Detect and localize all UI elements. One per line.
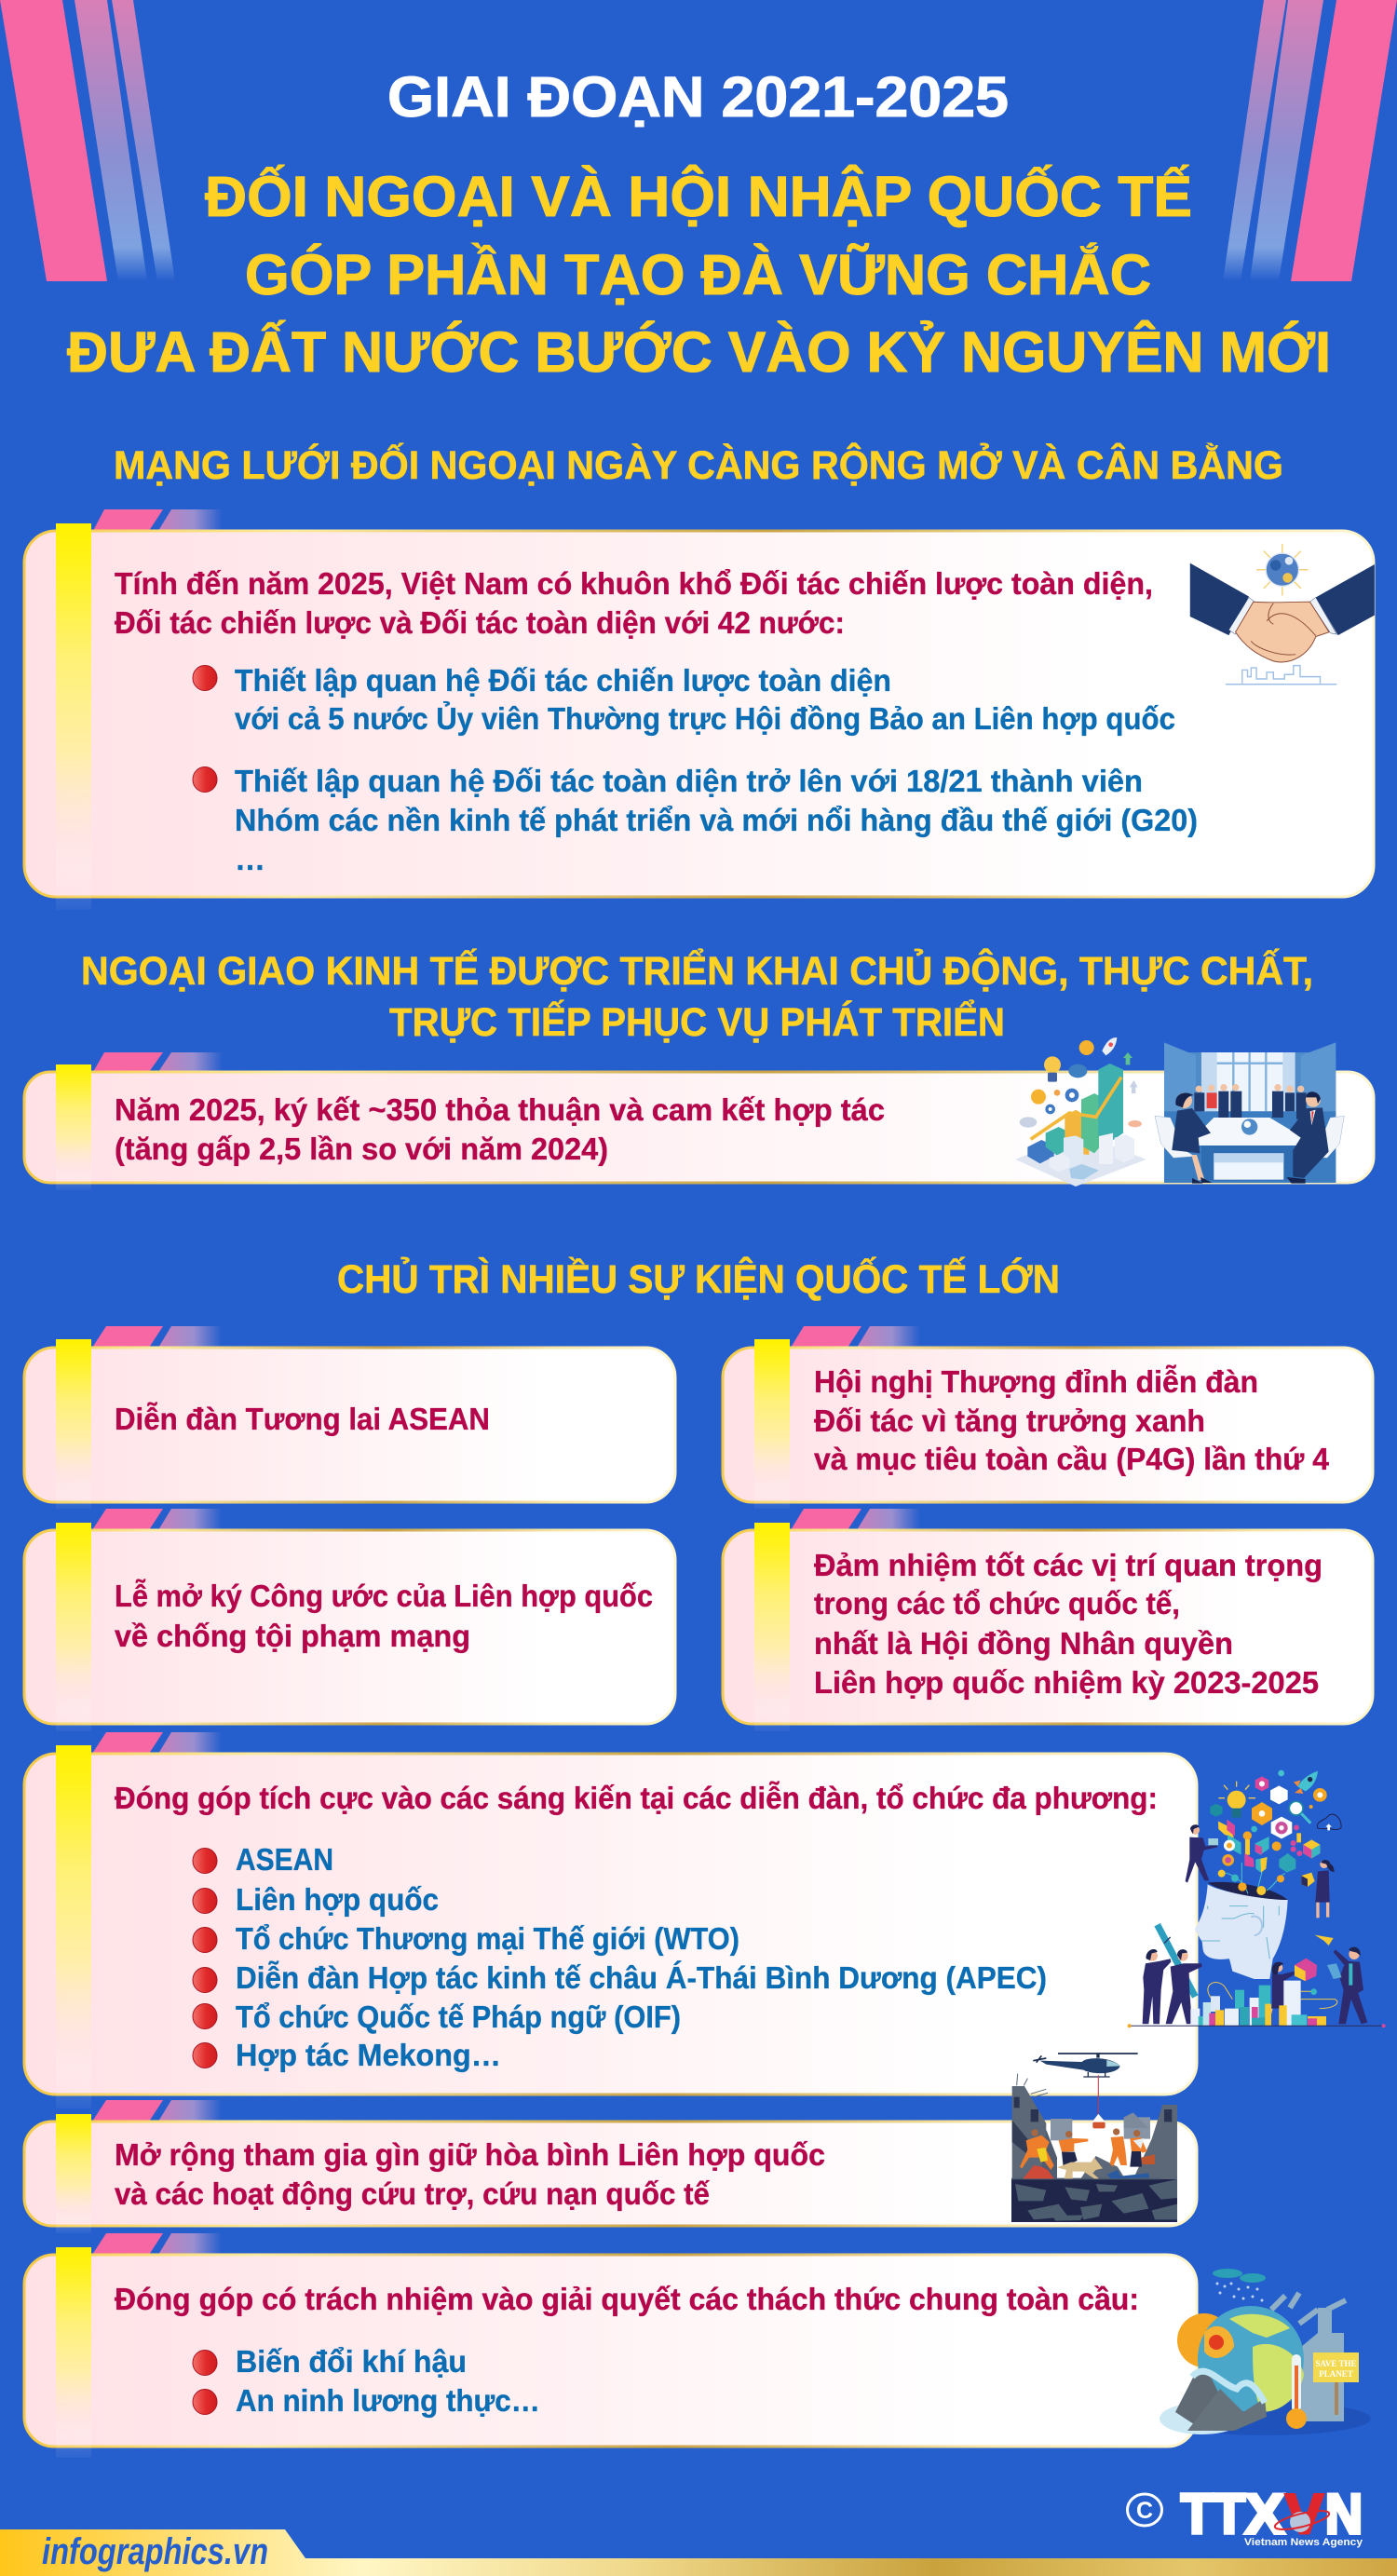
bullet list: Biến đổi khí hậu: [236, 2344, 467, 2379]
wordmark: V: [1285, 2483, 1323, 2545]
panel: international positions: [723, 1509, 1373, 1731]
icon: economic growth: [1015, 1037, 1146, 1186]
card background: [24, 1530, 675, 1724]
card background: [24, 2255, 1197, 2447]
title line 2: GÓP PHẦN TẠO ĐÀ VỮNG CHẮC: [245, 243, 1151, 306]
text: và các hoạt động cứu trợ, cứu nạn quốc tế: [115, 2176, 711, 2211]
title line 3: ĐƯA ĐẤT NƯỚC BƯỚC VÀO KỶ NGUYÊN MỚI: [67, 320, 1331, 384]
lead text: Đối tác chiến lược và Đối tác toàn diện với 42 nước:: [115, 605, 845, 640]
sign: save the planet: PLANET: [1319, 2369, 1353, 2379]
card background: [24, 531, 1374, 897]
bullet list: Nhóm các nền kinh tế phát triển và mới nổi hàng đầu thế giới (G20): [235, 803, 1198, 837]
bullet list: An ninh lương thực…: [236, 2383, 540, 2418]
title line 1: ĐỐI NGOẠI VÀ HỘI NHẬP QUỐC TẾ: [205, 165, 1192, 228]
yellow tab: [56, 523, 91, 910]
accent parallelograms: [92, 2100, 222, 2122]
city skyline: [1190, 1981, 1337, 2026]
sign: save the planet: SAVE THE: [1316, 2359, 1356, 2368]
footer band: [0, 2529, 1397, 2576]
bullet list: Tổ chức Thương mại Thế giới (WTO): [236, 1921, 739, 1956]
bullet list: Liên hợp quốc: [236, 1882, 439, 1917]
lead text: Đóng góp có trách nhiệm vào giải quyết các thách thức chung toàn cầu:: [115, 2282, 1139, 2316]
bullet list: với cả 5 nước Ủy viên Thường trực Hội đồng Bảo an Liên hợp quốc: [235, 701, 1175, 736]
panel: cybercrime convention: [24, 1509, 675, 1731]
icon: rescue scene: [1011, 2054, 1177, 2222]
text: (tăng gấp 2,5 lần so với năm 2024): [115, 1132, 608, 1166]
panel: P4G summit: [723, 1326, 1373, 1509]
bricks: [1023, 2165, 1054, 2178]
bullet list: …: [235, 842, 265, 876]
text: Hội nghị Thượng đỉnh diễn đàn: [814, 1364, 1258, 1399]
heading: economic diplomacy: [81, 948, 1313, 1045]
panel: partnership network: [24, 509, 1374, 910]
text: [115, 2137, 825, 2211]
wordmark: TT: [1181, 2483, 1245, 2545]
panel: economic agreements: [24, 1052, 1374, 1190]
card background: [24, 1072, 1374, 1183]
bullet list: [193, 1842, 1047, 2072]
text: Đảm nhiệm tốt các vị trí quan trọng: [814, 1548, 1322, 1582]
text: Năm 2025, ký kết ~350 thỏa thuận và cam kết hợp tác: [115, 1092, 885, 1127]
lead text: [115, 566, 1153, 640]
icon: handshake: [1190, 544, 1375, 685]
tagline: Vietnam News Agency: [1244, 2537, 1363, 2548]
text: Đối tác vì tăng trưởng xanh: [814, 1403, 1205, 1438]
copyright mark: C: [1136, 2498, 1153, 2524]
dog: [1057, 2158, 1103, 2178]
text: nhất là Hội đồng Nhân quyền: [814, 1626, 1233, 1661]
text: [814, 1548, 1322, 1700]
card background: [723, 1348, 1373, 1502]
bullet list: [193, 663, 1198, 876]
bullet list: Thiết lập quan hệ Đối tác chiến lược toàn diện: [235, 663, 891, 698]
wordmark: X: [1245, 2483, 1284, 2545]
panel: multilateral initiatives: [24, 1732, 1197, 2108]
text: trong các tổ chức quốc tế,: [814, 1586, 1180, 1620]
bullet list: Diễn đàn Hợp tác kinh tế châu Á-Thái Bình Dương (APEC): [236, 1960, 1047, 1995]
text: Mở rộng tham gia gìn giữ hòa bình Liên hợp quốc: [115, 2137, 825, 2172]
text: [115, 1579, 653, 1653]
bullet list: ASEAN: [236, 1842, 333, 1877]
figure: person top left: [1186, 1824, 1218, 1883]
accent parallelograms: [92, 2233, 222, 2255]
icon: climate change globe: [1160, 2269, 1371, 2435]
accent parallelograms: [92, 1326, 222, 1348]
panel: peacekeeping and rescue: [24, 2100, 1197, 2233]
yellow tab: [56, 1339, 91, 1509]
left decorative stripes: [0, 0, 175, 281]
text: về chống tội phạm mạng: [115, 1619, 470, 1653]
yellow tab: [754, 1339, 790, 1509]
bullet list: Thiết lập quan hệ Đối tác toàn diện trở lên với 18/21 thành viên: [235, 764, 1143, 798]
figure: woman with box: [1301, 1860, 1335, 1918]
card background: [24, 1754, 1197, 2095]
website label: infographics.vn: [42, 2531, 268, 2572]
heading: network: MẠNG LƯỚI ĐỐI NGOẠI NGÀY CÀNG RỘNG MỞ VÀ CÂN BẰNG: [114, 442, 1283, 488]
text: [814, 1364, 1330, 1476]
wordmark: N: [1325, 2483, 1363, 2545]
figure: people carrying pen: [1143, 1925, 1202, 2024]
accent parallelograms: [93, 509, 223, 531]
helicopter: [1033, 2054, 1138, 2128]
icon: signing ceremony: [1155, 1042, 1344, 1184]
text: Diễn đàn Tương lai ASEAN: [115, 1402, 490, 1436]
figure: woman with cube: [1266, 1959, 1317, 2025]
copyright mark: [1127, 2494, 1162, 2526]
figure: man with tablet: [1315, 1935, 1367, 2024]
wordmark: [1181, 2483, 1363, 2545]
icon: innovation head with people: [1128, 1770, 1386, 2027]
ground line: [1128, 2024, 1386, 2027]
heading: international events: CHỦ TRÌ NHIỀU SỰ KIỆN QUỐC TẾ LỚN: [337, 1256, 1060, 1302]
text: [115, 1092, 885, 1166]
bullet list: Hợp tác Mekong…: [236, 2038, 501, 2072]
title: [67, 65, 1331, 384]
yellow tab: [56, 1064, 91, 1190]
card background: [723, 1530, 1373, 1724]
text: Liên hợp quốc nhiệm kỳ 2023-2025: [814, 1665, 1319, 1700]
yellow tab: [56, 2114, 91, 2233]
right decorative stripes: [1223, 0, 1397, 281]
yellow tab: [754, 1523, 790, 1731]
accent parallelograms: [92, 1509, 222, 1530]
yellow tab: [56, 1745, 91, 2108]
text: Lễ mở ký Công ước của Liên hợp quốc: [115, 1579, 653, 1613]
accent parallelograms: [93, 1052, 223, 1072]
panel: global challenges: [24, 2233, 1197, 2458]
text: và mục tiêu toàn cầu (P4G) lần thứ 4: [814, 1442, 1330, 1476]
bullet list: [193, 2344, 540, 2418]
heading: economic diplomacy: NGOẠI GIAO KINH TẾ ĐƯỢC TRIỂN KHAI CHỦ ĐỘNG, THỰC CHẤT,: [81, 948, 1313, 994]
rescuers: [1020, 2128, 1155, 2170]
bullet list: Tổ chức Quốc tế Pháp ngữ (OIF): [236, 2000, 681, 2034]
title line: period: GIAI ĐOẠN 2021-2025: [387, 65, 1009, 129]
yellow tab: [56, 1523, 91, 1731]
accent parallelograms: [791, 1509, 920, 1530]
casualty: [1106, 2170, 1149, 2178]
card background: [24, 1348, 675, 1502]
heading: economic diplomacy: TRỰC TIẾP PHỤC VỤ PHÁT TRIỂN: [389, 999, 1005, 1045]
lead text: Đóng góp tích cực vào các sáng kiến tại các diễn đàn, tổ chức đa phương:: [115, 1781, 1158, 1815]
logo: TTXVN: [1127, 2483, 1363, 2548]
lead text: Tính đến năm 2025, Việt Nam có khuôn khổ Đối tác chiến lược toàn diện,: [115, 566, 1153, 601]
accent parallelograms: [92, 1732, 222, 1754]
panel: ASEAN future forum: [24, 1326, 675, 1509]
card background: [24, 2122, 1197, 2226]
yellow tab: [56, 2247, 91, 2458]
sign: save the planet: [1313, 2352, 1359, 2382]
accent parallelograms: [791, 1326, 920, 1348]
